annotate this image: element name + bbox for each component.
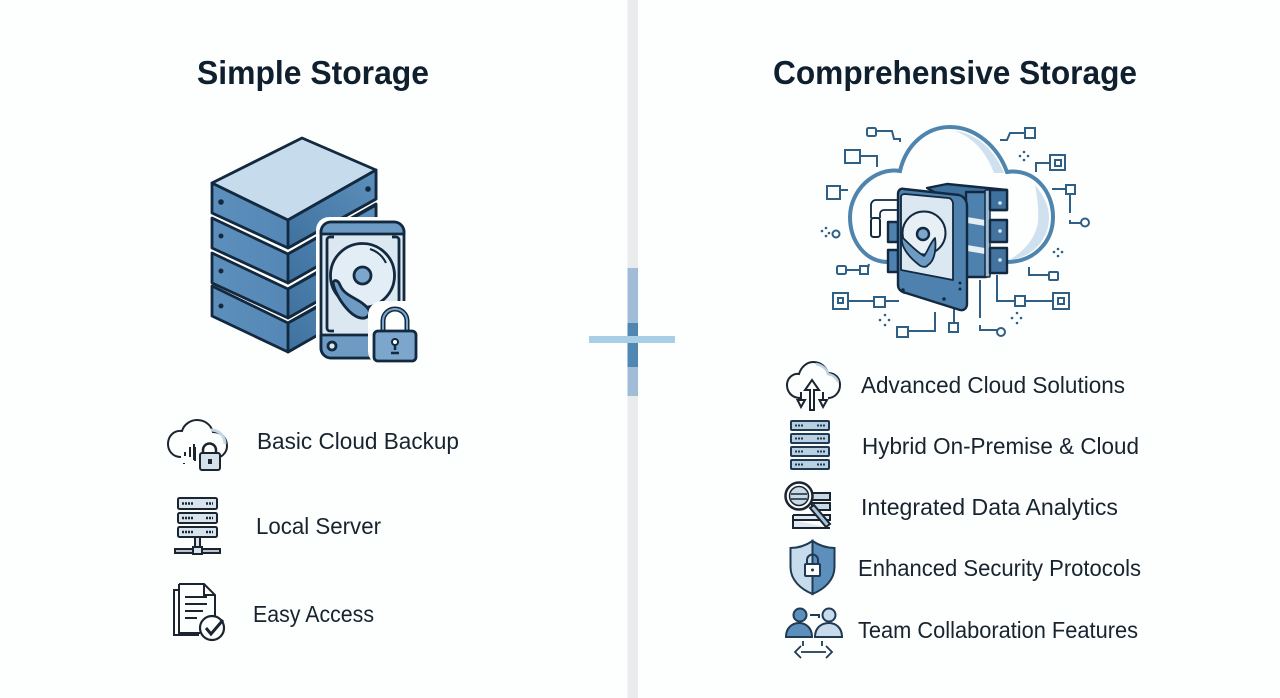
heading: comprehensive storage: Comprehensive Storage xyxy=(773,54,1137,91)
list item: basic cloud backup xyxy=(168,420,459,470)
panel: comprehensive storage xyxy=(773,54,1141,658)
icon: cloud with lock xyxy=(168,420,227,470)
icon: two people with arrows xyxy=(786,608,842,658)
icon: server racks xyxy=(791,421,829,469)
circuit traces xyxy=(827,128,1089,337)
label: local server: Local Server xyxy=(256,513,381,539)
list item: easy access xyxy=(174,584,374,640)
illustration: server stack with locked drive xyxy=(212,138,420,365)
label: hybrid on-premise and cloud: Hybrid On-Premise & Cloud xyxy=(862,433,1139,459)
list item: local server xyxy=(175,498,381,554)
list item: hybrid on-premise and cloud xyxy=(791,421,1139,469)
label: advanced cloud solutions: Advanced Cloud Solutions xyxy=(861,372,1125,398)
list item: advanced cloud solutions xyxy=(787,362,1125,410)
center divider with plus sign xyxy=(589,0,675,698)
cloud xyxy=(850,127,1053,262)
scattered dots xyxy=(821,151,1063,326)
panel: simple storage xyxy=(168,54,459,640)
label: team collaboration features: Team Collaboration Features xyxy=(858,617,1138,643)
icon: networked server xyxy=(175,498,220,554)
label: basic cloud backup: Basic Cloud Backup xyxy=(257,428,459,454)
illustration: cloud with drives and circuit nodes xyxy=(821,127,1089,337)
heading: simple storage: Simple Storage xyxy=(197,54,429,91)
list item: team collaboration features xyxy=(786,608,1138,658)
label: easy access: Easy Access xyxy=(253,601,374,627)
drive stack xyxy=(871,184,1007,310)
icon: document with check xyxy=(174,584,224,640)
icon: magnifier over data rows xyxy=(786,482,830,528)
list item: integrated data analytics xyxy=(786,482,1118,528)
label: enhanced security protocols: Enhanced Security Protocols xyxy=(858,555,1141,581)
label: integrated data analytics: Integrated Data Analytics xyxy=(861,494,1118,520)
list item: enhanced security protocols xyxy=(790,541,1141,594)
icon: cloud with arrows xyxy=(787,362,840,410)
icon: shield with lock xyxy=(790,541,834,594)
